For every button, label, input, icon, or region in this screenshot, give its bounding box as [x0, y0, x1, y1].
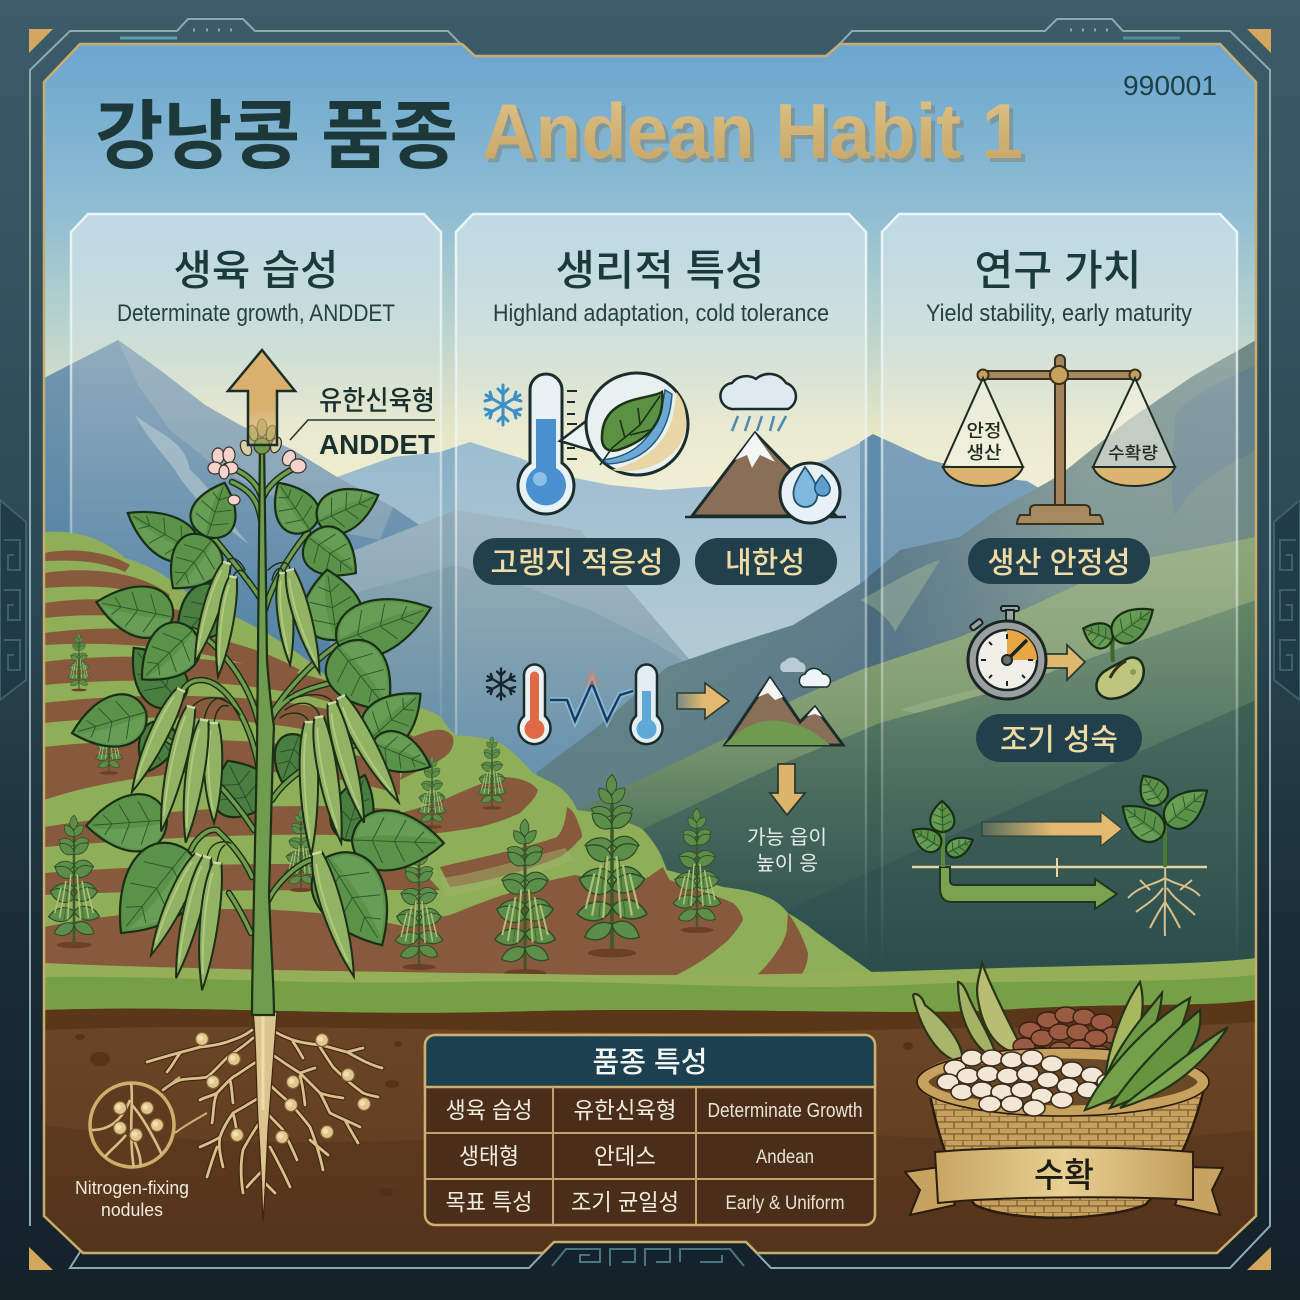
- panel: variety traits table: 생육 습성: [446, 1097, 532, 1123]
- basket: ribbon with harvest label: 수확: [1034, 1157, 1094, 1195]
- icon: upward growth arrow: [228, 350, 295, 445]
- panel: variety traits table: Determinate Growth: [708, 1100, 862, 1122]
- icon: balance scale: 수확량: [1108, 444, 1158, 463]
- plant: pods: [123, 560, 406, 991]
- panel: variety traits table: Early & Uniform: [726, 1193, 844, 1214]
- title: Andean Habit 1: [486, 91, 1027, 179]
- basket: weave body: [928, 1085, 1205, 1218]
- pill: production stability: [968, 538, 1150, 584]
- callout: nitrogen-fixing nodules inset: [75, 1077, 207, 1220]
- icon: stopwatch with arrow to bean: [968, 606, 1085, 699]
- panel: variety traits table: Andean: [756, 1147, 814, 1168]
- text: altitude note: [748, 827, 824, 872]
- icon: growth comparison with plants and arrows: [907, 768, 1217, 936]
- basket: white beans: [937, 1050, 1119, 1116]
- plant: flowers and buds: [208, 419, 306, 505]
- panel: physiological traits background: [456, 215, 866, 797]
- arrow: downward: [770, 764, 805, 815]
- icon: leaf in river callout: [560, 373, 688, 475]
- pill: early maturity: [976, 714, 1142, 762]
- panel: variety traits table: 생태형: [459, 1143, 519, 1169]
- icon: rain cloud: [720, 374, 796, 431]
- panel: research value background: [882, 215, 1237, 808]
- callout: determinate type label: [290, 386, 435, 460]
- heading: research value: 연구 가치: [974, 247, 1142, 294]
- title: Andean Habit 1: [482, 87, 1023, 175]
- panel: variety traits table: [425, 1035, 875, 1225]
- icon: balance scale: 안정: [966, 421, 1002, 441]
- icon: balance scale: [943, 355, 1175, 524]
- icon: balance scale: 생산: [966, 443, 1002, 463]
- plant: front leaves: [65, 471, 445, 963]
- ground strip: [45, 958, 1255, 1013]
- title: 강낭콩 품종: [95, 94, 458, 178]
- plant: back leaves: [132, 582, 375, 842]
- distant mountains: [45, 340, 1038, 775]
- callout: nitrogen-fixing nodules inset: nodules: [101, 1200, 163, 1220]
- callout: determinate type label: 유한신육형: [319, 386, 435, 416]
- heading: physiological traits: 생리적 특성: [556, 247, 764, 294]
- plant: main stem: [252, 440, 274, 1015]
- subheading: research value: Yield stability, early maturity: [926, 300, 1192, 327]
- subheading: physiological traits: Highland adaptation, cold tolerance: [493, 300, 829, 327]
- right slopes: [500, 340, 1256, 1000]
- icon: cold thermometer: [518, 374, 577, 514]
- icon: snowflake dark: [487, 668, 515, 700]
- pill: cold tolerance: [695, 538, 837, 585]
- icon: sprouting bean: [1078, 597, 1161, 699]
- icon: mountains with clouds: [725, 657, 843, 745]
- pill: early maturity: 조기 성숙: [1000, 724, 1118, 757]
- heading: growth habit: 생육 습성: [174, 247, 338, 294]
- pill: production stability: 생산 안정성: [988, 547, 1130, 580]
- icon: snowflake blue: [485, 385, 521, 425]
- icon: harvest basket: [905, 963, 1228, 1218]
- basket: left pods: [913, 963, 1024, 1062]
- icon: snowy mountain with water drop: [685, 433, 846, 523]
- pill: highland adaptability: 고랭지 적응성: [490, 547, 664, 580]
- terraced hillside: [44, 532, 873, 1000]
- pill: highland adaptability: [473, 538, 680, 585]
- soil: [44, 1000, 1256, 1256]
- sky: [45, 45, 1255, 490]
- bean plant: [65, 419, 445, 1015]
- text: altitude note: 높이 응: [756, 852, 818, 875]
- pill: cold tolerance: 내한성: [725, 547, 805, 580]
- panel: variety traits table: 유한신육형: [574, 1097, 676, 1123]
- plant: branches: [165, 466, 367, 933]
- panel: variety traits table: 목표 특성: [446, 1189, 532, 1215]
- panel: variety traits table: 안데스: [594, 1143, 656, 1169]
- title: [95, 87, 1027, 179]
- plant roots: [147, 1012, 382, 1221]
- panel: growth habit background: [71, 215, 440, 626]
- panel: variety traits table: 품종 특성: [592, 1047, 708, 1079]
- callout: nitrogen-fixing nodules inset: Nitrogen-fixing: [75, 1178, 189, 1198]
- text: altitude note: 가능 읍이: [747, 826, 827, 849]
- panel outlines: [71, 214, 1237, 965]
- basket: ribbon with harvest label: [905, 1148, 1223, 1215]
- catalogue number: 990001: [1123, 70, 1217, 101]
- callout: determinate type label: ANDDET: [319, 429, 435, 460]
- frame ornament: side meander patterns: [0, 500, 1300, 700]
- basket: right pods: [1085, 982, 1228, 1110]
- icon: temperature swing thermometers: [518, 664, 662, 744]
- arrow: to highlands: [677, 683, 729, 719]
- panel: variety traits table: 조기 균일성: [571, 1189, 679, 1215]
- basket: brown beans: [1013, 1007, 1122, 1072]
- small bean plants on terraces: [47, 633, 722, 977]
- subheading: growth habit: Determinate growth, ANDDET: [117, 300, 395, 327]
